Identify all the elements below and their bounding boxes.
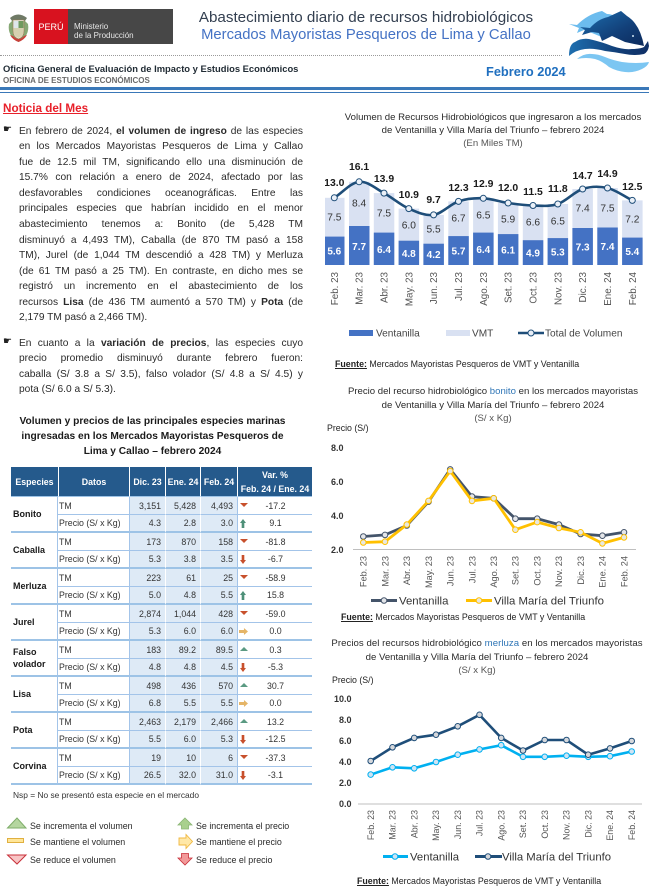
month labels: Ene. 24 (603, 271, 614, 306)
month labels: Ago. 23 (489, 556, 499, 588)
chart legend: Villa María del Triunfo (502, 852, 611, 864)
table footnote: Nsp = No se presentó esta especie en el mercado (13, 790, 199, 800)
chart: bonito price lines (327, 423, 636, 608)
total value labels: 11.5 (523, 187, 543, 198)
VMT value labels: 7.2 (625, 214, 640, 226)
table: volumes and prices by species: Precio (S/ x Kg) (59, 590, 121, 600)
table: volumes and prices by species: 498 (146, 680, 161, 690)
Ventanilla bars (324, 226, 643, 265)
Villa María del Triunfo line (363, 471, 624, 543)
table: volumes and prices by species: -12.5 (265, 734, 286, 744)
table: volumes and prices by species: 4.8 (149, 662, 161, 672)
Ventanilla line (363, 469, 624, 536)
table: volumes and prices by species: 61 (186, 572, 196, 582)
text block: volume news: En febrero de 2024, el volumen de ingreso de las especies (19, 126, 303, 136)
logo: Ministerio de la Producción block: Ministerio (74, 22, 108, 31)
month labels: Set. 23 (518, 810, 528, 838)
month labels: May. 23 (431, 810, 441, 841)
table: volumes and prices by species: 0.0 (269, 698, 282, 708)
y axis labels: 6.0 (339, 736, 352, 746)
logo: PERÚ red block: PERÚ (38, 22, 64, 32)
table: volumes and prices by species: 6.0 (184, 626, 196, 636)
month labels: Jun. 23 (429, 271, 440, 304)
legend: table symbols (6, 817, 289, 866)
legend icon: volume down (8, 855, 26, 864)
chart: monthly volume stacked bars with total line (325, 162, 643, 340)
table: volumes and prices by species: Bonito (13, 509, 42, 519)
month labels: Feb. 23 (330, 271, 341, 305)
Ventanilla value labels: 7.3 (576, 242, 590, 254)
y axis labels: 6.0 (331, 477, 344, 487)
table: volumes and prices by species: 223 (146, 572, 161, 582)
table: volumes and prices by species: 183 (146, 644, 161, 654)
table: volumes and prices by species: 570 (218, 680, 233, 690)
table: volumes and prices by species: Lisa (13, 689, 31, 699)
Ventanilla markers (368, 742, 634, 777)
VMT value labels: 5.5 (427, 224, 441, 236)
table: volumes and prices by species: 2,179 (174, 716, 196, 726)
table heading (20, 416, 285, 457)
chart 1 title line 1: Volumen de Recursos Hidrobiológicos que ingresaron a los mercados (345, 112, 641, 123)
y axis labels: 4.0 (339, 757, 352, 767)
text block: volume news: registró un incremento en el abastecimiento de los (19, 281, 303, 292)
table: volumes and prices by species: TM (59, 644, 72, 654)
table: volumes and prices by species: 4.8 (184, 590, 196, 600)
Ventanilla value labels: 4.2 (427, 250, 441, 261)
chart 3 heading (331, 638, 643, 676)
table: volumes and prices by species: 158 (218, 536, 233, 546)
month labels (366, 810, 637, 841)
table: volumes and prices by species: 6 (228, 752, 233, 762)
VMT value labels: 6.6 (526, 218, 540, 228)
table: volumes and prices by species: 9.1 (269, 518, 282, 528)
month labels (330, 271, 639, 306)
text block: volume news: recursos Lisa (de 436 TM aumentó a 570 TM) y Pota (de (19, 297, 303, 308)
x axis (353, 548, 636, 550)
month labels: Mar. 23 (388, 810, 398, 840)
table: volumes and prices by species: Jurel (13, 617, 35, 627)
chart legend (349, 328, 622, 340)
y axis labels: 10.0 (334, 694, 352, 704)
table: volumes and prices by species: 2.8 (184, 518, 196, 528)
header rule (0, 87, 649, 93)
table: volumes and prices by species: 26.5 (144, 770, 161, 780)
VMT value labels: 6.7 (451, 214, 466, 224)
chart 2 source: Fuente: Mercados Mayoristas Pesqueros de VMT y Ventanilla (341, 612, 585, 622)
month labels: Nov. 23 (554, 556, 564, 587)
table: volumes and prices by species: 3.8 (184, 554, 196, 564)
chart legend: Ventanilla (410, 852, 460, 864)
table: volumes and prices by species: -58.9 (265, 572, 286, 582)
chart: merluza price lines (332, 675, 642, 864)
table: volumes and prices by species: TM (59, 536, 72, 546)
chart legend: Ventanilla (399, 596, 449, 608)
table: volumes and prices by species: 89.5 (216, 644, 233, 654)
y axis labels: 4.0 (331, 511, 344, 521)
Ventanilla markers (360, 467, 627, 539)
table: volumes and prices by species: 0.0 (269, 626, 282, 636)
table: volumes and prices by species: 5.3 (149, 554, 161, 564)
table: volumes and prices by species: 10 (186, 752, 196, 762)
chart 3 title line 1: Precios del recursos hidrobiológico merluza en los mercados mayoristas (331, 638, 643, 649)
month labels: Mar. 23 (355, 271, 366, 305)
VMT value labels: 7.5 (327, 212, 342, 224)
legend label: volume same: Se mantiene el volumen (30, 837, 125, 847)
table: volumes and prices by species: 3.0 (221, 518, 233, 528)
table: volumes and prices by species: 5,428 (174, 500, 196, 510)
table: volumes and prices by species: TM (59, 680, 72, 690)
table: volumes and prices by species: Caballa (13, 545, 45, 555)
table heading: Volumen y precios de las principales especies marinas (20, 416, 285, 427)
month labels: Abr. 23 (402, 556, 412, 585)
heading: Noticia del Mes: Noticia del Mes (3, 102, 88, 115)
text block: volume news: abastecimiento tenemos a: Bonito (de 5,428 TM (19, 219, 303, 230)
table: volumes and prices by species: -6.7 (268, 554, 283, 564)
table: volumes and prices by species: Precio (S/ x Kg) (59, 626, 121, 636)
text block: volume news: desfavorables condiciones oceanográficas. Entre las (19, 188, 303, 199)
office name: Oficina General de Evaluación de Impacto y Estudios Económicos (3, 63, 298, 74)
month labels: Jul. 23 (467, 556, 477, 583)
month labels: Nov. 23 (553, 271, 564, 305)
logo: PERÚ red block (34, 9, 68, 44)
table: volumes and prices by species: Var. % (262, 470, 288, 480)
total volume line (334, 182, 632, 215)
text block: price news: caballa (S/ 3.8 a S/ 3.5), falso volador (S/ 4.8 a S/ 4.5) y (19, 369, 303, 380)
legend icon: price down (178, 854, 192, 865)
table: volumes and prices by species: 5.5 (221, 590, 233, 600)
month labels: Dic. 23 (583, 810, 593, 838)
table: volumes and prices by species: Datos (82, 476, 106, 486)
y axis labels: 2.0 (331, 545, 344, 555)
logo: Ministerio de la Producción block (68, 9, 173, 44)
legend icon: price up (178, 818, 192, 829)
logo: Ministerio de la Producción block: de la Producción (74, 31, 134, 40)
table: volumes and prices by species: 32.0 (179, 770, 196, 780)
text block: volume news (19, 126, 304, 323)
table: volumes and prices by species: 436 (181, 680, 196, 690)
table: volumes and prices by species: Dic. 23 (133, 476, 162, 486)
month labels: Dic. 23 (578, 271, 589, 302)
month labels: Abr. 23 (380, 271, 390, 303)
table heading: Lima y Callao – febrero 2024 (84, 446, 221, 457)
table: volumes and prices by species: TM (59, 608, 72, 618)
table: volumes and prices by species: Feb. 24 (204, 476, 234, 486)
table: volumes and prices by species: 3.5 (221, 554, 233, 564)
Ventanilla value labels: 6.4 (377, 245, 391, 256)
chart legend (371, 596, 604, 608)
Ventanilla value labels: 4.8 (402, 249, 416, 260)
table: volumes and prices by species: Especies (15, 476, 54, 486)
text block: volume news: 15.7% con relación a enero de 2024, afectado por las (19, 172, 303, 183)
month labels: Mar. 23 (380, 556, 390, 587)
y axis labels: 0.0 (339, 799, 352, 809)
chart 1 heading (344, 112, 641, 149)
table: volumes and prices by species: 30.7 (267, 680, 284, 690)
total value labels: 14.9 (597, 169, 618, 180)
legend label: price up: Se incrementa el precio (196, 821, 289, 831)
x axis (358, 803, 642, 805)
chart 3 title line 3: (S/ x Kg) (458, 665, 496, 676)
chart 3 source: Fuente: Mercados Mayoristas Pesqueros de VMT y Ventanilla (357, 876, 601, 886)
month labels: Set. 23 (511, 556, 521, 585)
table: volumes and prices by species: 13.2 (267, 716, 284, 726)
table: volumes and prices by species: TM (59, 752, 72, 762)
legend label: price same: Se mantiene el precio (196, 837, 282, 847)
Ventanilla value labels: 7.7 (352, 242, 366, 253)
month labels: Jul. 23 (454, 271, 465, 301)
VMT value labels: 5.9 (501, 214, 516, 226)
y axis labels: 8.0 (331, 443, 344, 453)
table: volumes and prices by species: -81.8 (265, 536, 286, 546)
month labels: Oct. 23 (540, 810, 550, 839)
VMT value labels: 6.5 (551, 216, 565, 228)
table: volumes and prices by species: 4.3 (149, 518, 161, 528)
legend label: price down: Se reduce el precio (196, 855, 273, 865)
table: volumes and prices by species: 5.3 (149, 626, 161, 636)
total line markers (331, 179, 635, 218)
total value labels (324, 162, 643, 206)
table: volumes and prices by species: Falso (13, 646, 37, 656)
legend label: volume up: Se incrementa el volumen (30, 821, 133, 831)
text block: volume news: 2,179 TM pasó a 2,466 TM). (19, 312, 147, 323)
table: volumes and prices by species: 15.8 (267, 590, 284, 600)
legend icon: price same (179, 834, 192, 848)
icon: bullet hand 2: ☛ (3, 336, 12, 347)
table: volumes and prices by species: Precio (S/ x Kg) (59, 698, 121, 708)
table: volumes and prices by species: Ene. 24 (168, 476, 198, 486)
VMT value labels: 6.0 (402, 220, 416, 232)
table: volumes and prices by species: 6.0 (184, 734, 196, 744)
legend icon: volume same (8, 838, 24, 842)
total value labels: 13.9 (374, 174, 394, 185)
total value labels: 14.7 (572, 171, 593, 182)
chart legend: Villa María del Triunfo (494, 596, 604, 608)
table: volumes and prices by species: 5.5 (149, 734, 161, 744)
table: volumes and prices by species: Pota (13, 725, 33, 735)
Ventanilla value labels: 6.4 (476, 245, 491, 256)
table: volumes and prices by species: 3,151 (139, 500, 161, 510)
month labels: Jul. 23 (475, 810, 485, 836)
table: volumes and prices by species: Precio (S/ x Kg) (59, 770, 121, 780)
text block: volume news: principales especies que habrían incidido en el menor (19, 203, 303, 214)
month labels: Ene. 24 (598, 556, 608, 588)
text block: volume news: TM), Jurel (de 1,044 TM descendió a 428 TM) y Merluza (19, 250, 303, 261)
table: volumes and prices by species: 1,044 (174, 608, 196, 618)
month labels: Feb. 23 (359, 556, 369, 587)
table: volumes and prices by species: 428 (218, 608, 233, 618)
month labels: Feb. 24 (628, 271, 639, 305)
table: volumes and prices by species: 31.0 (216, 770, 233, 780)
table heading: ingresadas en los Mercados Mayoristas Pesqueros de (21, 431, 284, 442)
table: volumes and prices by species: Merluza (13, 581, 47, 591)
table: volumes and prices by species: 2,874 (139, 608, 161, 618)
total value labels: 9.7 (426, 195, 441, 206)
month labels: Jun. 23 (453, 810, 463, 839)
table: volumes and prices by species: 25 (223, 572, 233, 582)
total value labels: 11.8 (548, 184, 568, 195)
text block: price news (19, 338, 303, 395)
table: volumes and prices by species: -59.0 (265, 608, 286, 618)
Villa María del Triunfo markers (368, 712, 634, 764)
chart 1 title line 3: (En Miles TM) (463, 138, 523, 149)
table: volumes and prices by species: 0.3 (269, 644, 282, 654)
legend label: volume down: Se reduce el volumen (30, 855, 116, 865)
legend icon: volume up (8, 818, 26, 828)
table: volumes and prices by species: TM (59, 500, 72, 510)
chart legend (383, 852, 611, 864)
logo: Peru coat of arms (8, 14, 28, 42)
chart 2 heading (348, 386, 638, 424)
chart 3 title line 2: de Ventanilla y Villa María del Triunfo – febrero 2024 (366, 652, 588, 663)
month labels: Feb. 23 (366, 810, 376, 840)
Ventanilla value labels: 5.4 (625, 247, 640, 258)
month labels (359, 556, 629, 588)
Ventanilla value labels: 5.3 (551, 248, 565, 258)
VMT value labels: 7.5 (600, 204, 615, 214)
office subtitle: OFICINA DE ESTUDIOS ECONÓMICOS (3, 76, 150, 85)
table: volumes and prices by species: 4.5 (221, 662, 233, 672)
table: volumes and prices by species: 173 (146, 536, 161, 546)
table: volumes and prices by species (11, 467, 312, 785)
total value labels: 16.1 (349, 162, 369, 173)
chart 1 title line 2: de Ventanilla y Villa María del Triunfo – febrero 2024 (382, 125, 604, 136)
y axis labels: 2.0 (339, 778, 352, 788)
table: volumes and prices by species: volador (13, 659, 46, 669)
text block: price news: precio promedio disminuyó durante febrero fueron: (19, 353, 303, 364)
month labels: Jun. 23 (446, 556, 456, 586)
Ventanilla value labels: 7.4 (601, 242, 615, 253)
VMT value labels: 7.5 (377, 208, 391, 220)
table: volumes and prices by species: TM (59, 572, 72, 582)
total value labels: 10.9 (399, 190, 419, 201)
text block: volume news: (de 61 TM pasó a 25 TM). En contraste, en dicho mes se (19, 266, 303, 277)
title line 2: Mercados Mayoristas Pesqueros de Lima y Callao (201, 27, 531, 43)
table: volumes and prices by species: 19 (151, 752, 161, 762)
month labels: Ago. 23 (479, 271, 490, 306)
table: volumes and prices by species: Precio (S/ x Kg) (59, 662, 121, 672)
text block: volume news: en los Mercados Mayoristas Pesqueros de Lima y Callao (19, 141, 303, 152)
table: volumes and prices by species: Precio (S/ x Kg) (59, 734, 121, 744)
month labels: Abr. 23 (409, 810, 419, 838)
date: Febrero 2024: Febrero 2024 (486, 64, 566, 79)
text block: volume news: fue de 12.5 mil TM, significando ello una disminución de (19, 157, 303, 168)
total value labels: 12.3 (448, 183, 469, 194)
month labels: May. 23 (424, 556, 434, 588)
chart legend: Ventanilla (376, 328, 420, 340)
chart legend: VMT (472, 328, 493, 340)
table: volumes and prices by species: -3.1 (268, 770, 283, 780)
icon: bullet hand 1: ☛ (3, 124, 12, 135)
table: volumes and prices by species: 2,466 (211, 716, 233, 726)
VMT value labels (327, 198, 640, 236)
table: volumes and prices by species: 5.5 (221, 698, 233, 708)
VMT value labels: 6.5 (476, 210, 491, 222)
y axis labels (334, 694, 352, 809)
Ventanilla value labels: 5.6 (327, 246, 342, 258)
y axis labels (331, 443, 344, 555)
table: volumes and prices by species: 89.2 (179, 644, 196, 654)
table: volumes and prices by species: TM (59, 716, 72, 726)
table: volumes and prices by species: Corvina (13, 761, 47, 771)
Ventanilla value labels: 5.7 (452, 246, 466, 258)
title (199, 9, 533, 43)
month labels: Ene. 24 (605, 810, 615, 841)
month labels: Dic. 23 (576, 556, 586, 585)
month labels: Oct. 23 (532, 556, 542, 586)
total value labels: 12.0 (498, 183, 518, 194)
table: volumes and prices by species: 4.8 (184, 662, 196, 672)
table: volumes and prices by species: -17.2 (265, 500, 286, 510)
table: volumes and prices by species: -37.3 (265, 752, 286, 762)
table: volumes and prices by species: 4,493 (211, 500, 233, 510)
table: volumes and prices by species: 5.5 (184, 698, 196, 708)
Ventanilla value labels: 6.1 (501, 246, 515, 256)
month labels: Oct. 23 (528, 271, 540, 304)
text block: price news: pota (S/ 6.0 a S/ 5.3). (19, 384, 116, 395)
VMT value labels: 8.4 (352, 198, 367, 210)
month labels: Feb. 24 (619, 556, 629, 587)
Ventanilla line (371, 745, 632, 775)
chart 1 source: Fuente: Mercados Mayoristas Pesqueros de VMT y Ventanilla (335, 359, 579, 369)
table: volumes and prices by species: 5.3 (221, 734, 233, 744)
divider: dotted line (0, 55, 562, 56)
table: volumes and prices by species: 870 (181, 536, 196, 546)
table: volumes and prices by species: -5.3 (268, 662, 283, 672)
chart 2 title line 3: (S/ x Kg) (474, 413, 512, 424)
title line 1: Abastecimiento diario de recursos hidrobiológicos (199, 9, 533, 26)
chart 2 title line 1: Precio del recurso hidrobiológico bonito en los mercados mayoristas (348, 386, 638, 397)
month labels: Ago. 23 (496, 810, 506, 841)
table: volumes and prices by species: Precio (S/ x Kg) (59, 554, 121, 564)
text block: volume news: disminuyó a 4,493 TM), Caballa (de 870 TM pasó a 158 (19, 235, 303, 246)
total value labels: 12.5 (622, 182, 643, 193)
y axis title: Precio (S/) (332, 675, 374, 685)
month labels: Set. 23 (504, 271, 515, 303)
table: volumes and prices by species: 6.0 (221, 626, 233, 636)
VMT value labels: 7.4 (576, 204, 590, 214)
month labels: Nov. 23 (562, 810, 572, 840)
month labels: Feb. 24 (627, 810, 637, 840)
icon: fish and waves (569, 11, 649, 72)
Ventanilla value labels (327, 242, 640, 261)
table: volumes and prices by species: Feb. 24 / Ene. 24 (241, 484, 309, 494)
Ventanilla value labels: 4.9 (526, 248, 540, 260)
chart legend: Total de Volumen (545, 328, 622, 340)
y axis labels: 8.0 (339, 715, 352, 725)
y axis title: Precio (S/) (327, 423, 369, 433)
month labels: May. 23 (404, 271, 415, 306)
table: volumes and prices by species: 6.8 (149, 698, 161, 708)
chart 2 title line 2: de Ventanilla y Villa María del Triunfo – febrero 2024 (382, 400, 604, 411)
total value labels: 12.9 (473, 179, 494, 190)
Villa María del Triunfo markers (360, 468, 627, 546)
VMT bars (324, 182, 643, 265)
text block: price news: En cuanto a la variación de precios, las especies cuyo (19, 338, 303, 348)
Villa María del Triunfo line (371, 715, 632, 761)
table: volumes and prices by species: Precio (S/ x Kg) (59, 518, 121, 528)
table: volumes and prices by species: 5.0 (149, 590, 161, 600)
table: volumes and prices by species: 2,463 (139, 716, 161, 726)
